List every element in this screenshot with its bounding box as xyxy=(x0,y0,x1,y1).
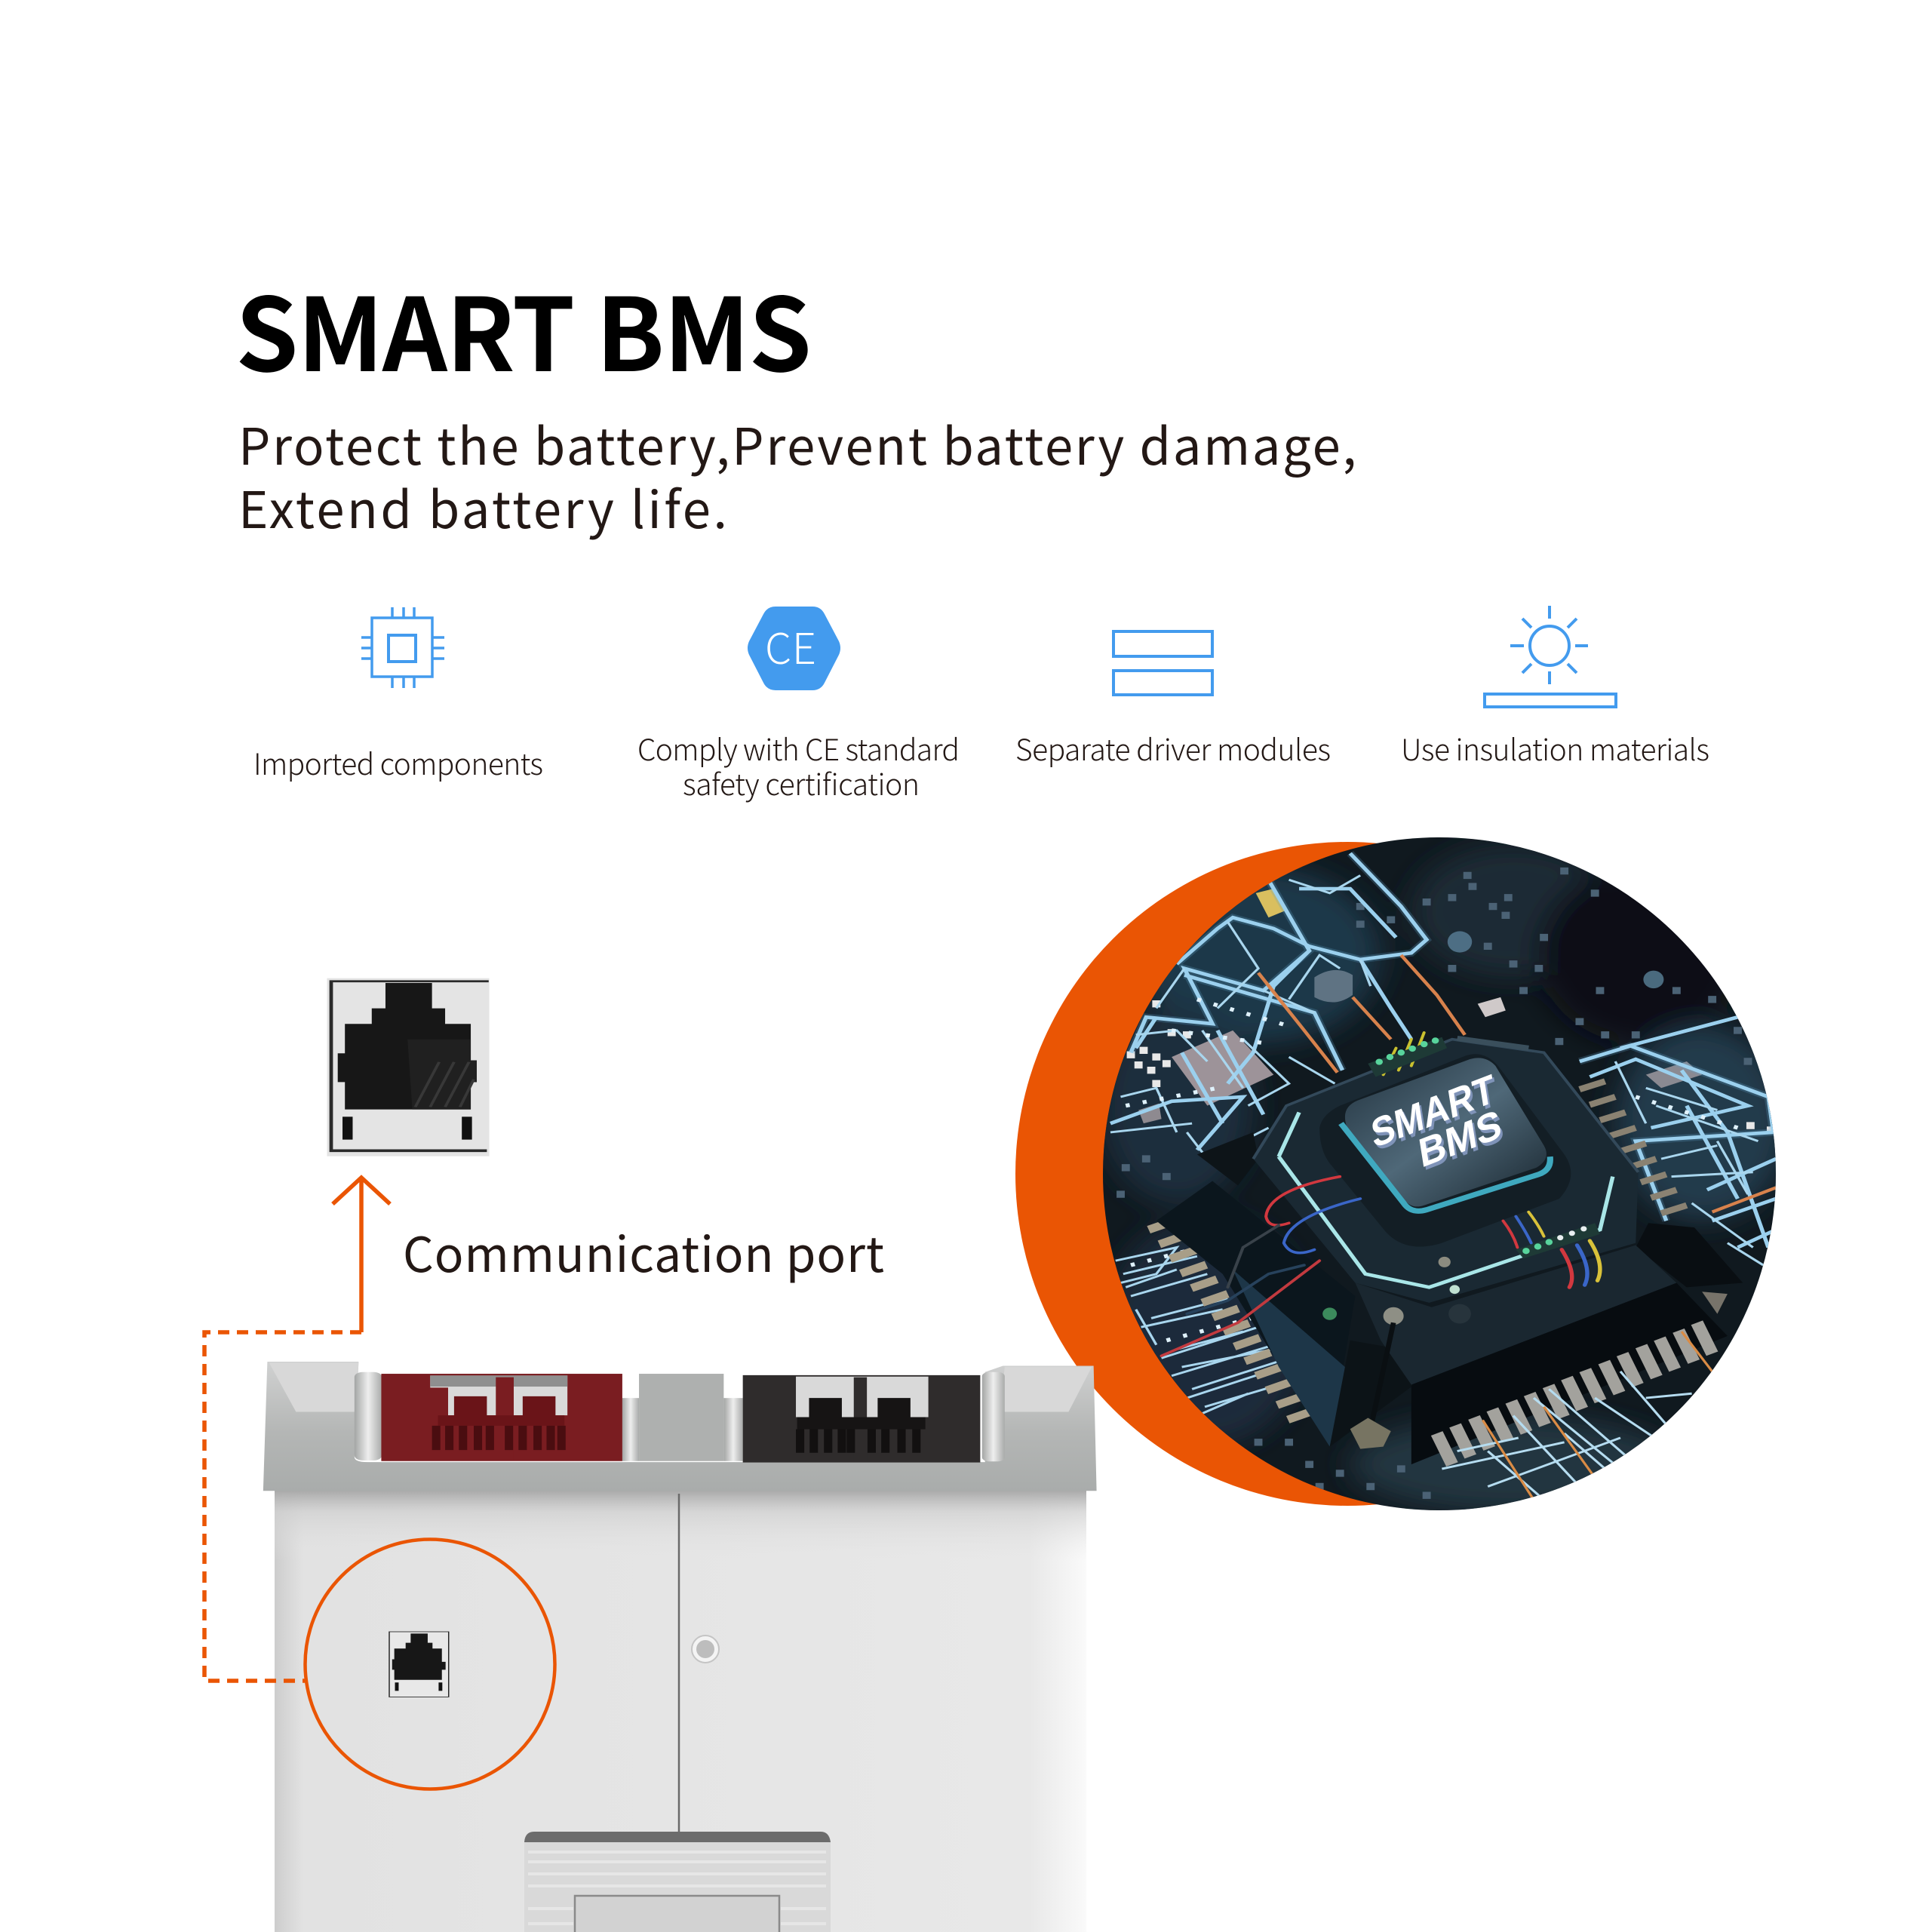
chip legend text: SMART xyxy=(1371,1069,1500,1160)
black terminal xyxy=(743,1375,980,1463)
circuit traces: fine xyxy=(1110,875,1763,1416)
label: communication port: Communication port xyxy=(403,1217,884,1286)
pin headers xyxy=(1368,1037,1600,1258)
feature: imported components xyxy=(253,607,543,784)
label xyxy=(637,727,960,804)
orange crescent xyxy=(1015,842,1679,1506)
label: safety certification xyxy=(683,762,920,804)
title: SMART BMS xyxy=(235,254,812,401)
circuit traces: soft glow xyxy=(1131,853,1774,1221)
top plate xyxy=(1345,1058,1547,1206)
screws and base details xyxy=(1322,1257,1728,1449)
icon: chip xyxy=(361,607,444,688)
right comb pins xyxy=(1580,1081,1687,1213)
dashed leader xyxy=(204,1332,361,1681)
wires xyxy=(1162,1033,1600,1356)
white dots xyxy=(1131,1004,1771,1130)
subtitle xyxy=(238,407,1356,543)
feature: separate driver modules xyxy=(1015,631,1331,769)
octagonal module frame xyxy=(1253,1040,1639,1303)
circuit traces: blue xyxy=(1110,853,1776,1248)
port on battery xyxy=(389,1632,449,1697)
cyan glow edge xyxy=(1341,1123,1550,1211)
subtitle: Extend battery life. xyxy=(238,470,727,543)
trace specks xyxy=(1126,1000,1737,1341)
grey centre block xyxy=(639,1374,723,1461)
callout circle xyxy=(305,1539,555,1789)
icon: sun over plate xyxy=(1485,606,1616,707)
label: Comply with CE standard xyxy=(637,727,960,769)
label: Separate driver modules xyxy=(1015,727,1331,769)
chip legend text: SMART xyxy=(1368,1066,1497,1157)
port detail enlarged xyxy=(327,978,490,1156)
board tones xyxy=(1100,844,1789,1513)
bevel facets xyxy=(269,1362,358,1412)
circuit image: smart BMS chip xyxy=(1094,830,1789,1516)
lower traces xyxy=(1442,1371,1692,1500)
bottom pins xyxy=(1437,1322,1712,1464)
label: Imported components xyxy=(253,742,543,784)
side pins xyxy=(1149,1221,1313,1420)
battery top cap with terminals xyxy=(263,1362,1097,1491)
silver posts xyxy=(355,1372,382,1461)
chip legend text: BMS xyxy=(1416,1101,1504,1177)
cap shell xyxy=(263,1362,1097,1491)
subtitle: Protect the battery,Prevent battery damage, xyxy=(238,407,1356,480)
raised square housing xyxy=(1319,1054,1571,1247)
handle xyxy=(524,1832,831,1932)
icon: two modules xyxy=(1113,631,1212,695)
battery body xyxy=(275,1490,1086,1932)
icon: CE hexagon: CE xyxy=(765,616,816,677)
circuit traces: orange xyxy=(1258,955,1776,1212)
dim dots xyxy=(1120,871,1748,1495)
feature: insulation xyxy=(1401,606,1709,769)
door seam xyxy=(678,1494,680,1832)
icon: CE hexagon xyxy=(748,607,840,690)
label: Use insulation materials xyxy=(1401,727,1709,769)
arrow from port to detail xyxy=(204,1177,390,1681)
feature: CE xyxy=(637,607,960,804)
chip legend text: BMS xyxy=(1418,1104,1507,1180)
pale board blocks xyxy=(1138,889,1702,1123)
red terminal xyxy=(381,1374,622,1461)
screw xyxy=(692,1636,719,1663)
black mounting skirts xyxy=(1156,1132,1743,1464)
